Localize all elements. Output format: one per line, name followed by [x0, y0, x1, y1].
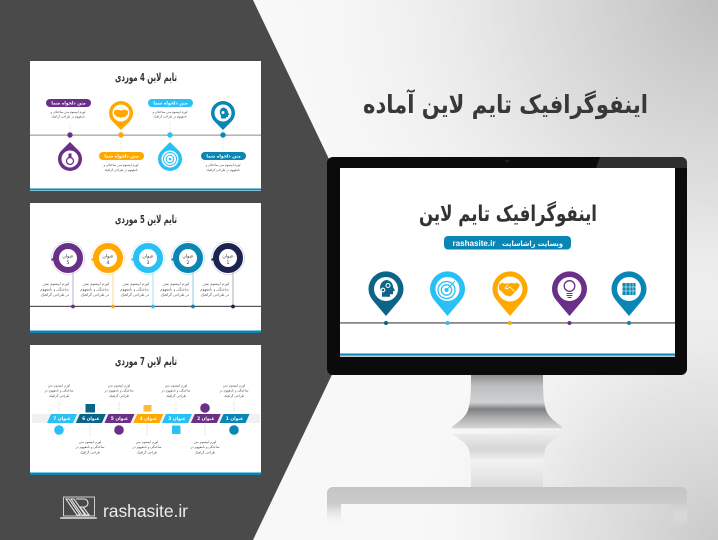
callout: blue: لورم ایپسوم متن ساختگی و — [205, 163, 240, 168]
callout: blue: نامفهوم در طراحی گرافیک — [206, 168, 240, 173]
callout: cyan: لورم ایپسوم متن ساختگی و — [152, 110, 187, 115]
slide title: تایم لاین 5 موردی — [115, 213, 177, 226]
panel: 7-item timeline slide — [30, 345, 261, 475]
step 1 — [219, 384, 250, 435]
step 3: عنوان 3 — [168, 416, 186, 422]
circle item 3: در طراحی گرافیک — [121, 292, 149, 297]
circle item 2: در طراحی گرافیک — [161, 292, 189, 297]
step 4: عنوان 4 — [140, 416, 157, 422]
icon: purple drop — [58, 142, 82, 171]
logo text: rashasite.ir — [103, 501, 188, 521]
callout: orange: لورم ایپسوم متن ساختگی و — [103, 163, 138, 168]
step 1: ساختگی و نامفهوم در — [219, 388, 249, 394]
circle item 4: عنوان — [102, 254, 114, 260]
step 3: طراحی گرافیک — [166, 394, 187, 398]
callout: cyan: متن دلخواه شما — [153, 102, 188, 107]
step 7: طراحی گرافیک — [49, 394, 70, 398]
icon: laptop logo — [60, 497, 97, 519]
circle item 3: 3 — [147, 260, 150, 266]
circle item 1: 1 — [227, 260, 230, 266]
website badge: وبسایت راشاسایت — [502, 239, 563, 248]
panel: 4-item timeline slide — [30, 61, 261, 191]
step 2: عنوان 2 — [197, 416, 214, 422]
slide title: تایم لاین 4 موردی — [115, 71, 177, 84]
step 6: عنوان 6 — [82, 416, 99, 422]
website badge: rashasite.ir — [452, 239, 496, 248]
circle item 1: در طراحی گرافیک — [201, 292, 229, 297]
step 3: ساختگی و نامفهوم در — [161, 388, 191, 394]
dark left panel — [0, 0, 382, 540]
icon: orange pin handshake — [109, 101, 133, 130]
circle item 3: ساختگی و نامفهوم — [120, 286, 149, 292]
monitor stand — [452, 375, 562, 430]
circle item 4: در طراحی گرافیک — [81, 292, 109, 297]
callout: orange — [99, 152, 144, 173]
step 6: ساختگی و نامفهوم در — [75, 445, 105, 450]
circle item 3: لورم ایپسوم متن — [123, 282, 149, 287]
step 1: طراحی گرافیک — [224, 394, 245, 398]
callout: cyan: نامفهوم در طراحی گرافیک — [153, 114, 187, 120]
heading: اینفوگرافیک تایم لاین آماده — [363, 89, 648, 120]
circle item 1 — [200, 242, 244, 308]
step 6: طراحی گرافیک — [80, 450, 101, 454]
callout: orange: نامفهوم در طراحی گرافیک — [104, 168, 138, 173]
step 5: لورم ایپسوم متن — [108, 384, 130, 388]
panel: 5-item timeline slide — [30, 203, 261, 333]
step 5: عنوان 5 — [111, 416, 128, 422]
circle item 1: لورم ایپسوم متن — [203, 282, 229, 287]
pin: target — [430, 271, 465, 325]
callout: orange: متن دلخواه شما — [104, 155, 139, 160]
screen title: اینفوگرافیک تایم لاین — [419, 200, 597, 227]
circle item 1: عنوان — [222, 254, 234, 260]
step 7: عنوان 7 — [53, 416, 71, 422]
callout: purple: نامفهوم در طراحی گرافیک — [51, 114, 85, 120]
step 7 — [44, 384, 77, 435]
step 7: لورم ایپسوم متن — [48, 384, 70, 388]
icon: blue pin head — [211, 101, 235, 130]
slide title: تایم لاین 7 موردی — [115, 355, 177, 368]
callout: blue — [201, 152, 246, 173]
screen — [340, 168, 675, 357]
logo — [60, 497, 188, 521]
circle item 4 — [80, 242, 124, 308]
pin: light bulb — [552, 271, 587, 325]
circle item 5: در طراحی گرافیک — [41, 292, 69, 297]
website badge — [444, 236, 571, 250]
circle item 3 — [120, 242, 164, 308]
timeline — [340, 322, 675, 324]
circle item 2: ساختگی و نامفهوم — [160, 286, 189, 292]
step 4: ساختگی و نامفهوم در — [132, 445, 162, 450]
circle item 4: لورم ایپسوم متن — [83, 282, 109, 287]
circle item 5: ساختگی و نامفهوم — [40, 286, 69, 292]
step 2: ساختگی و نامفهوم در — [190, 445, 220, 450]
pin: head with gears — [369, 271, 404, 325]
step 5: طراحی گرافیک — [109, 394, 130, 398]
monitor reflection — [327, 434, 687, 525]
step 3 — [161, 384, 192, 434]
step 2: لورم ایپسوم متن — [194, 440, 216, 445]
callout: purple: لورم ایپسوم متن ساختگی و — [50, 110, 85, 115]
icon: cyan drop target — [158, 142, 182, 171]
circle item 1: ساختگی و نامفهوم — [200, 286, 229, 292]
circle item 5: عنوان — [62, 254, 74, 260]
step 6: لورم ایپسوم متن — [79, 440, 101, 445]
timeline dots — [67, 132, 226, 138]
step 5 — [104, 384, 134, 435]
circle item 4: 4 — [107, 260, 110, 266]
circle item 5 — [40, 242, 84, 308]
callout: blue: متن دلخواه شما — [206, 155, 241, 160]
callout: cyan — [148, 99, 193, 120]
step 4 — [132, 405, 163, 454]
callout: purple — [46, 99, 91, 120]
step 2: طراحی گرافیک — [195, 450, 216, 454]
circle item 2: عنوان — [182, 254, 194, 260]
circle item 2: 2 — [187, 260, 190, 266]
step 6 — [75, 404, 106, 454]
pin: handshake — [493, 271, 528, 325]
circle item 5: لورم ایپسوم متن — [43, 282, 69, 287]
circle item 4: ساختگی و نامفهوم — [80, 286, 109, 292]
pin: clipboard — [612, 271, 646, 325]
step 5: ساختگی و نامفهوم در — [104, 388, 134, 394]
step 7: ساختگی و نامفهوم در — [44, 388, 74, 394]
circle item 5: 5 — [67, 260, 70, 266]
step 4: لورم ایپسوم متن — [136, 440, 158, 445]
step 3: لورم ایپسوم متن — [165, 384, 187, 388]
circle item 3: عنوان — [142, 254, 154, 260]
step 2 — [190, 403, 221, 454]
step 1: عنوان 1 — [226, 416, 243, 422]
step 1: لورم ایپسوم متن — [223, 384, 245, 388]
circle item 2 — [160, 242, 204, 308]
monitor — [327, 157, 687, 375]
circle item 2: لورم ایپسوم متن — [163, 282, 189, 287]
step 4: طراحی گرافیک — [137, 450, 158, 454]
callout: purple: متن دلخواه شما — [51, 102, 86, 107]
